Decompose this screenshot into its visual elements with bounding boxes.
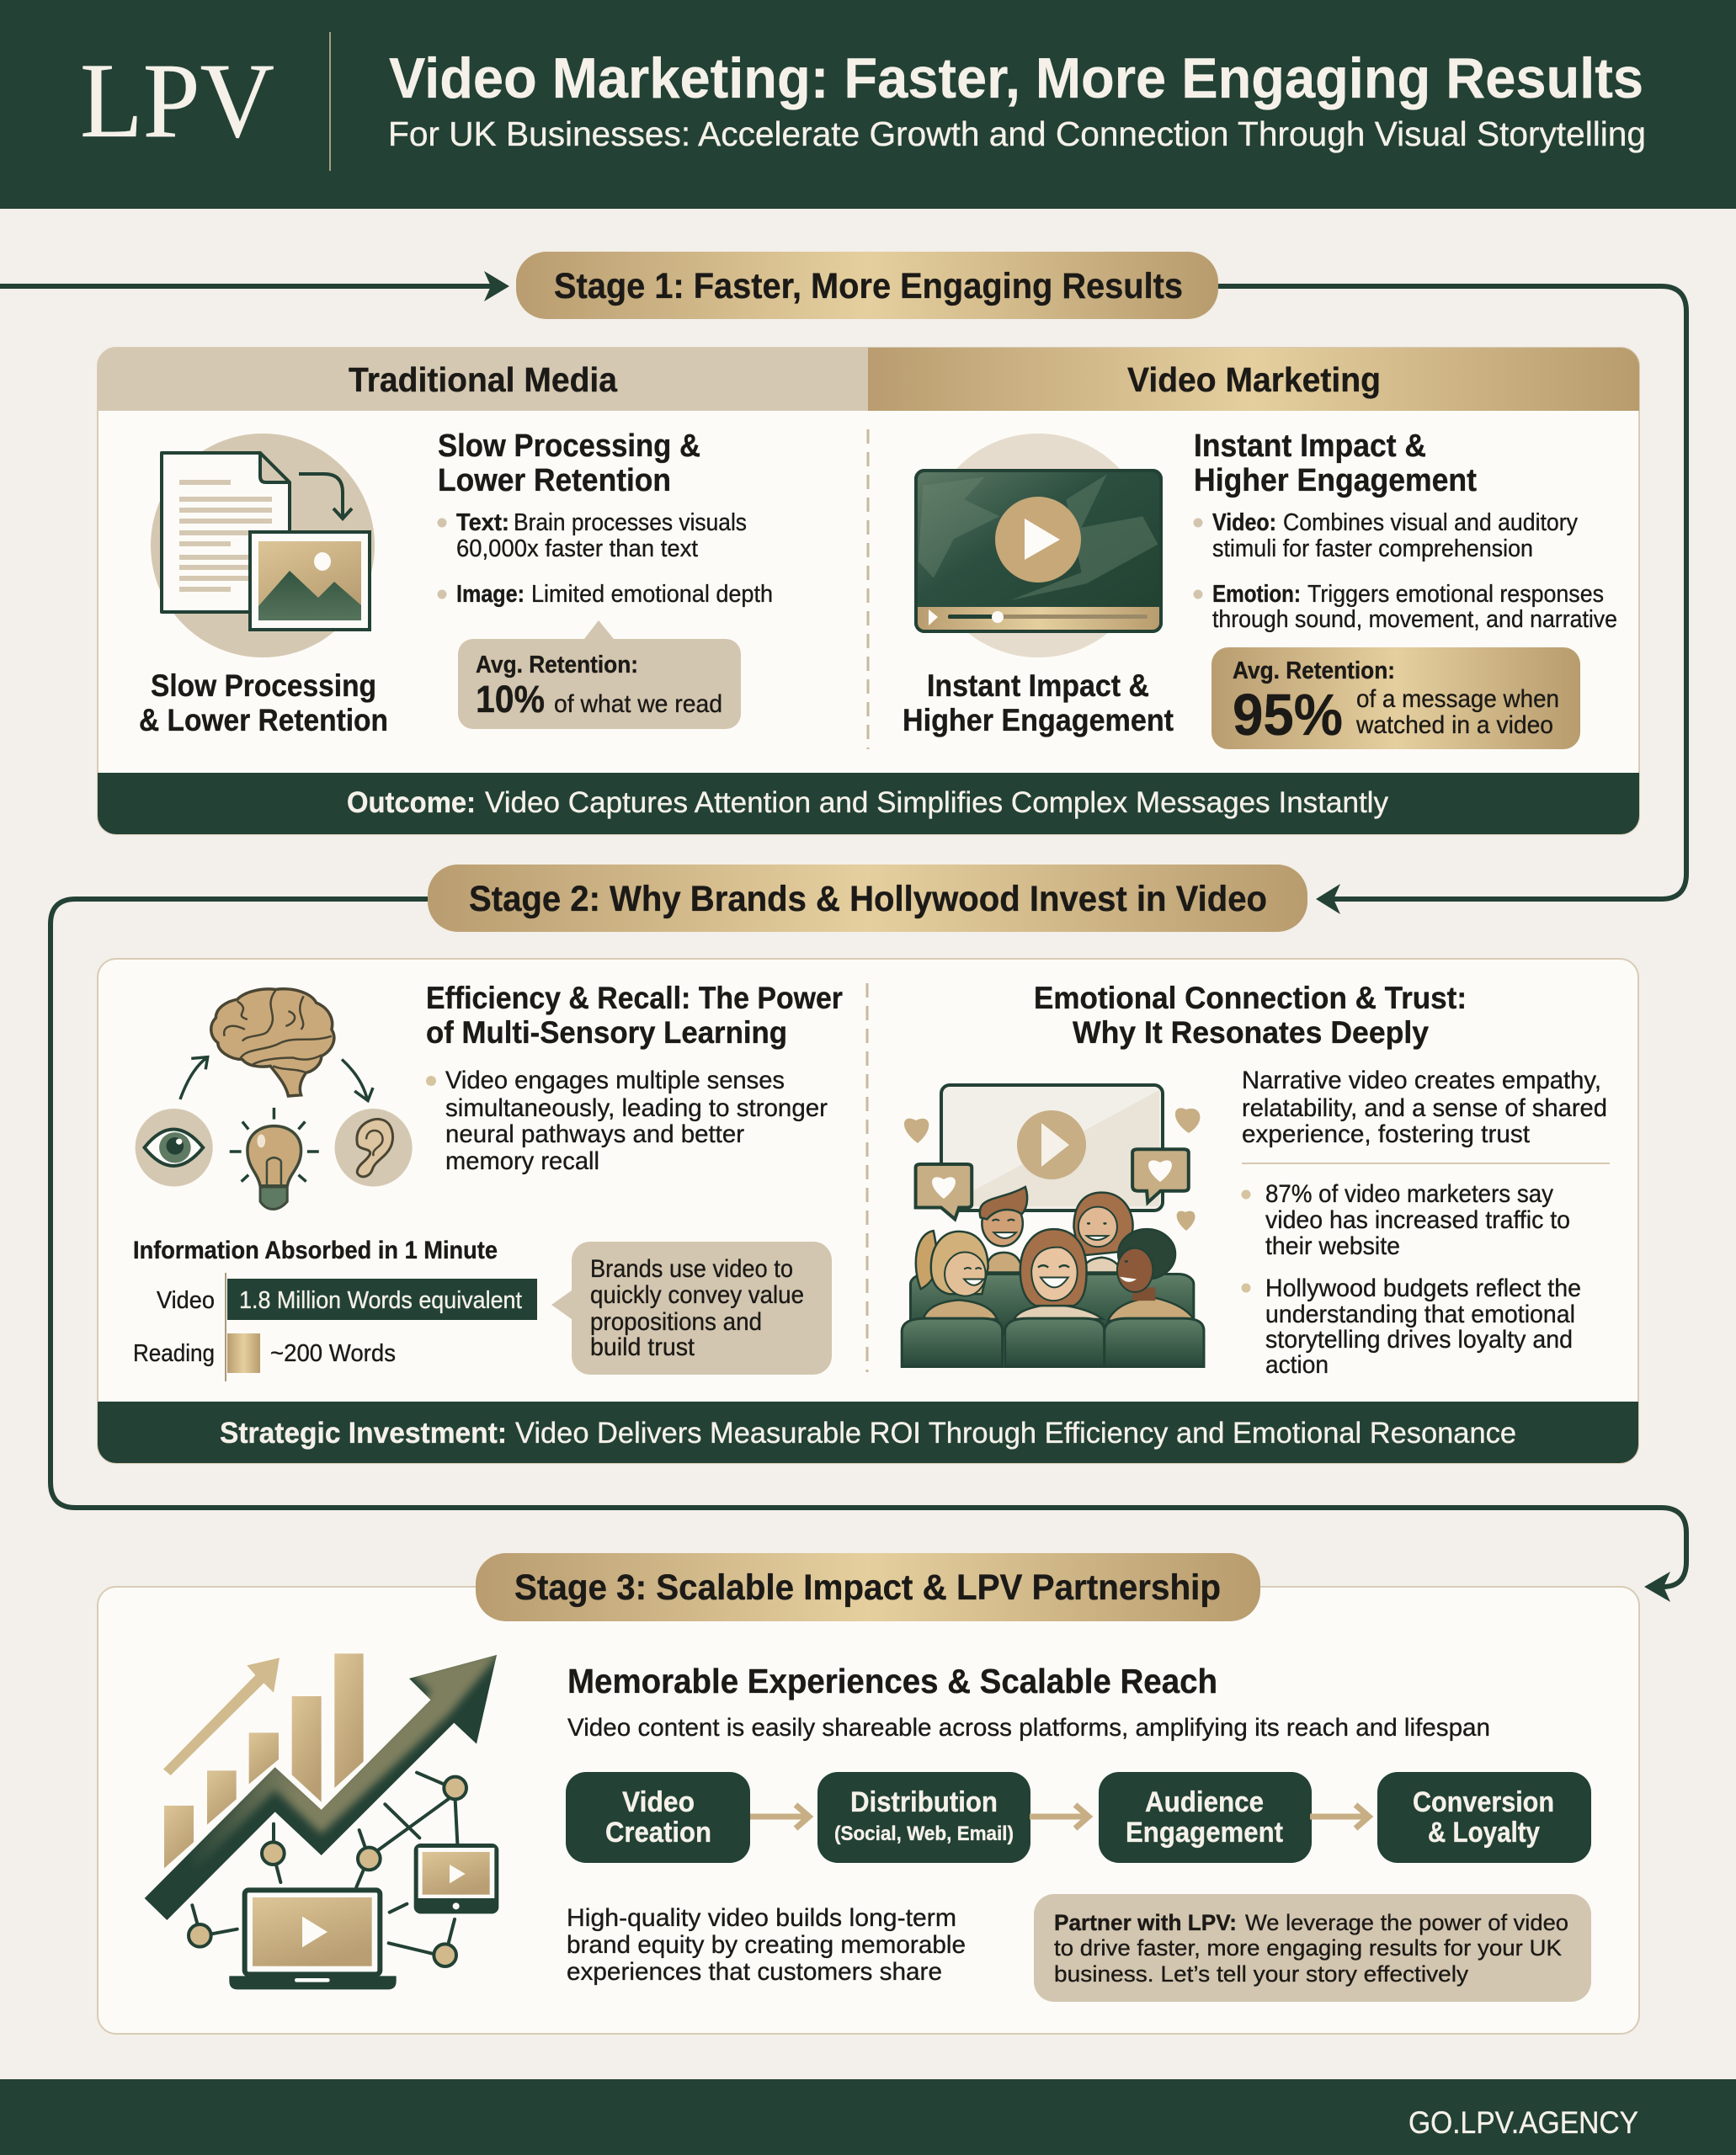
heading: emotional connection: Why It Resonates Deeply (1073, 1015, 1429, 1050)
bullets: text and image: Image: (456, 581, 525, 608)
bullets: video and emotion: Combines visual and auditory (1283, 509, 1578, 536)
label: instant impact: Higher Engagement (903, 703, 1174, 737)
heading: slow processing: Lower Retention (438, 463, 671, 498)
bar chart: information absorbed in 1 minute: Reading (133, 1340, 215, 1367)
header band (0, 0, 1736, 209)
callout: 10% retention: 10% (476, 678, 545, 721)
flow step: conversion and loyalty: & Loyalty (1428, 1817, 1540, 1849)
flow step: video creation (566, 1772, 750, 1863)
callout: partner with LPV: We leverage the power of video (1245, 1910, 1568, 1935)
bullets: traffic and hollywood budgets: Hollywood budgets reflect the (1265, 1274, 1581, 1302)
text: shareable: Video content is easily shareable across platforms, amplifying its reach and lifespan (567, 1714, 1490, 1742)
bullets: text and image (438, 509, 773, 608)
bullet: multi sensory (426, 1067, 828, 1175)
callout: brands use video: build trust (590, 1333, 695, 1361)
stage 2 pill (428, 865, 1307, 932)
callout: 95% retention: watched in a video (1355, 711, 1553, 739)
bullets: traffic and hollywood budgets: video has increased traffic to (1265, 1206, 1570, 1234)
callout: partner with LPV (1034, 1894, 1591, 2002)
person: man at right (1108, 1229, 1194, 1321)
arrow: step 2 to 3 (1030, 1805, 1089, 1828)
flow step: distribution: (Social, Web, Email) (834, 1822, 1014, 1845)
strategic investment bar: Strategic Investment: (220, 1417, 507, 1450)
bullets: traffic and hollywood budgets: storytelling drives loyalty and (1265, 1326, 1573, 1354)
illustration: audience watching a screen (902, 1085, 1204, 1366)
column header: traditional media: Traditional Media (349, 360, 618, 399)
column header: traditional media (98, 348, 868, 411)
callout: 95% retention: Avg. Retention: (1233, 657, 1395, 684)
panel: stage 3 (98, 1587, 1639, 2034)
bullet: multi sensory: neural pathways and better (445, 1120, 744, 1148)
callout: brands use video: Brands use video to (590, 1255, 793, 1283)
label: instant impact (903, 668, 1174, 737)
person: woman in centre (1014, 1229, 1103, 1319)
bullets: text and image: Brain processes visuals (514, 509, 747, 536)
bar chart: information absorbed in 1 minute: ~200 Words (270, 1340, 396, 1367)
text: narrative video: relatability, and a sense of shared (1242, 1094, 1607, 1122)
person: woman at back right (1073, 1193, 1133, 1273)
icon: video player (916, 434, 1161, 657)
text: brand equity: experiences that customers share (567, 1958, 942, 1986)
bullets: traffic and hollywood budgets: action (1265, 1351, 1329, 1379)
bullet: multi sensory: Video engages multiple senses (445, 1067, 785, 1094)
text: narrative video: Narrative video creates empathy, (1242, 1067, 1601, 1094)
text: brand equity: brand equity by creating memorable (567, 1931, 966, 1959)
icon: document and image (151, 434, 375, 657)
label: slow processing: Slow Processing (151, 668, 376, 703)
callout: partner with LPV: business. Let’s tell your story effectively (1054, 1961, 1469, 1987)
heading: efficiency and recall: of Multi-Sensory Learning (426, 1015, 787, 1050)
callout: 95% retention: 95% (1233, 682, 1343, 748)
flow arrow stage 2 to stage 3 (51, 899, 1686, 1602)
stage 3 pill: Stage 3: Scalable Impact & LPV Partnership (514, 1567, 1221, 1608)
text: narrative video (1242, 1067, 1610, 1164)
title: Video Marketing: Faster, More Engaging Results (389, 46, 1643, 110)
bar chart: information absorbed in 1 minute: Video (157, 1287, 215, 1314)
heading: emotional connection (1034, 981, 1467, 1050)
callout: 95% retention: of a message when (1356, 685, 1559, 713)
column header: video marketing: Video Marketing (1127, 360, 1381, 399)
footer band (0, 2079, 1736, 2155)
bullet: multi sensory: simultaneously, leading to stronger (445, 1094, 828, 1122)
bullets: video and emotion: Emotion: (1212, 581, 1301, 608)
outcome bar: Outcome: (347, 786, 476, 819)
label: slow processing (139, 668, 388, 737)
illustration: growth chart and devices (145, 1647, 505, 1989)
heading: instant impact: Higher Engagement (1194, 463, 1477, 498)
heading: slow processing (438, 428, 700, 498)
person: woman at left (916, 1231, 998, 1319)
stage 2 pill: Stage 2: Why Brands & Hollywood Invest in Video (469, 879, 1267, 919)
flow step: audience engagement (1099, 1772, 1312, 1863)
callout: brands use video (551, 1242, 832, 1375)
callout: 10% retention: Avg. Retention: (476, 652, 638, 678)
bullet: multi sensory: memory recall (445, 1147, 599, 1175)
heading: instant impact: Instant Impact & (1194, 428, 1426, 464)
stage 1 pill: Stage 1: Faster, More Engaging Results (554, 266, 1183, 306)
heading: slow processing: Slow Processing & (438, 428, 700, 464)
flow step: distribution (817, 1772, 1030, 1863)
bullets: video and emotion: stimuli for faster comprehension (1212, 535, 1533, 562)
text: narrative video: experience, fostering trust (1242, 1120, 1531, 1148)
label: instant impact: Instant Impact & (927, 668, 1149, 703)
heading: instant impact (1194, 428, 1477, 498)
callout: partner with LPV: to drive faster, more engaging results for your UK (1054, 1935, 1562, 1961)
flow arrow stage 1 to stage 2 (1218, 286, 1686, 914)
bullets: video and emotion (1194, 509, 1617, 633)
flow step: conversion and loyalty (1377, 1772, 1591, 1863)
strategic investment bar: Video Delivers Measurable ROI Through Efficiency and Emotional Resonance (515, 1417, 1516, 1450)
callout: partner with LPV: Partner with LPV: (1054, 1910, 1237, 1935)
bar chart: information absorbed in 1 minute: Information Absorbed in 1 Minute (133, 1237, 498, 1264)
outcome bar (98, 773, 1639, 834)
column header: video marketing (868, 348, 1639, 411)
panel: stage 2 (98, 959, 1638, 1463)
bullets: video and emotion: Triggers emotional responses (1307, 581, 1604, 608)
flow step: audience engagement: Engagement (1126, 1817, 1283, 1849)
callout: brands use video: propositions and (590, 1308, 762, 1336)
flow step: distribution: Distribution (850, 1786, 998, 1818)
callout: 10% retention: of what we read (554, 690, 722, 718)
bar chart: information absorbed in 1 minute (133, 1237, 537, 1381)
callout: 95% retention (1211, 647, 1580, 749)
text: brand equity (567, 1904, 966, 1986)
bullets: text and image: Limited emotional depth (531, 581, 773, 608)
logo: LPV: LPV (80, 42, 274, 160)
bullets: traffic and hollywood budgets (1241, 1180, 1581, 1379)
person: man at back left (980, 1187, 1027, 1273)
label: slow processing: & Lower Retention (139, 703, 388, 737)
flow step: audience engagement: Audience (1145, 1786, 1264, 1818)
arrow: step 1 to 2 (750, 1805, 809, 1828)
flow arrow into stage 1 (0, 271, 509, 301)
flow step: video creation: Video (622, 1786, 695, 1818)
bullets: video and emotion: through sound, movement, and narrative (1212, 606, 1617, 633)
icon: brain, eye, bulb and ear (136, 989, 413, 1209)
heading: emotional connection: Emotional Connection & Trust: (1034, 981, 1467, 1015)
bullets: text and image: 60,000x faster than text (456, 535, 698, 562)
bullets: traffic and hollywood budgets: 87% of video marketers say (1265, 1180, 1553, 1208)
footer band: GO.LPV.AGENCY (1409, 2105, 1638, 2140)
callout: 10% retention (458, 620, 741, 729)
strategic investment bar (98, 1402, 1638, 1463)
outcome bar: Video Captures Attention and Simplifies Complex Messages Instantly (485, 786, 1388, 819)
flow step: video creation: Creation (605, 1817, 711, 1849)
subtitle: For UK Businesses: Accelerate Growth and Connection Through Visual Storytelling (388, 114, 1646, 153)
bullets: video and emotion: Video: (1212, 509, 1276, 536)
stage 1 pill (516, 252, 1218, 319)
bar chart: information absorbed in 1 minute: 1.8 Million Words equivalent (239, 1287, 522, 1314)
panel: stage 1 comparison (98, 348, 1639, 834)
flow step: conversion and loyalty: Conversion (1413, 1786, 1554, 1818)
bullets: traffic and hollywood budgets: understanding that emotional (1265, 1301, 1575, 1328)
bullets: traffic and hollywood budgets: their website (1265, 1232, 1400, 1260)
text: brand equity: High-quality video builds long-term (567, 1904, 956, 1932)
heading: efficiency and recall: Efficiency & Recall: The Power (426, 981, 843, 1015)
heading: memorable experiences: Memorable Experiences & Scalable Reach (567, 1662, 1217, 1700)
stage 3 pill (476, 1553, 1260, 1621)
callout: brands use video: quickly convey value (590, 1281, 804, 1309)
arrow: step 3 to 4 (1310, 1805, 1369, 1828)
bullets: text and image: Text: (456, 509, 509, 536)
heading: efficiency and recall (426, 981, 843, 1050)
